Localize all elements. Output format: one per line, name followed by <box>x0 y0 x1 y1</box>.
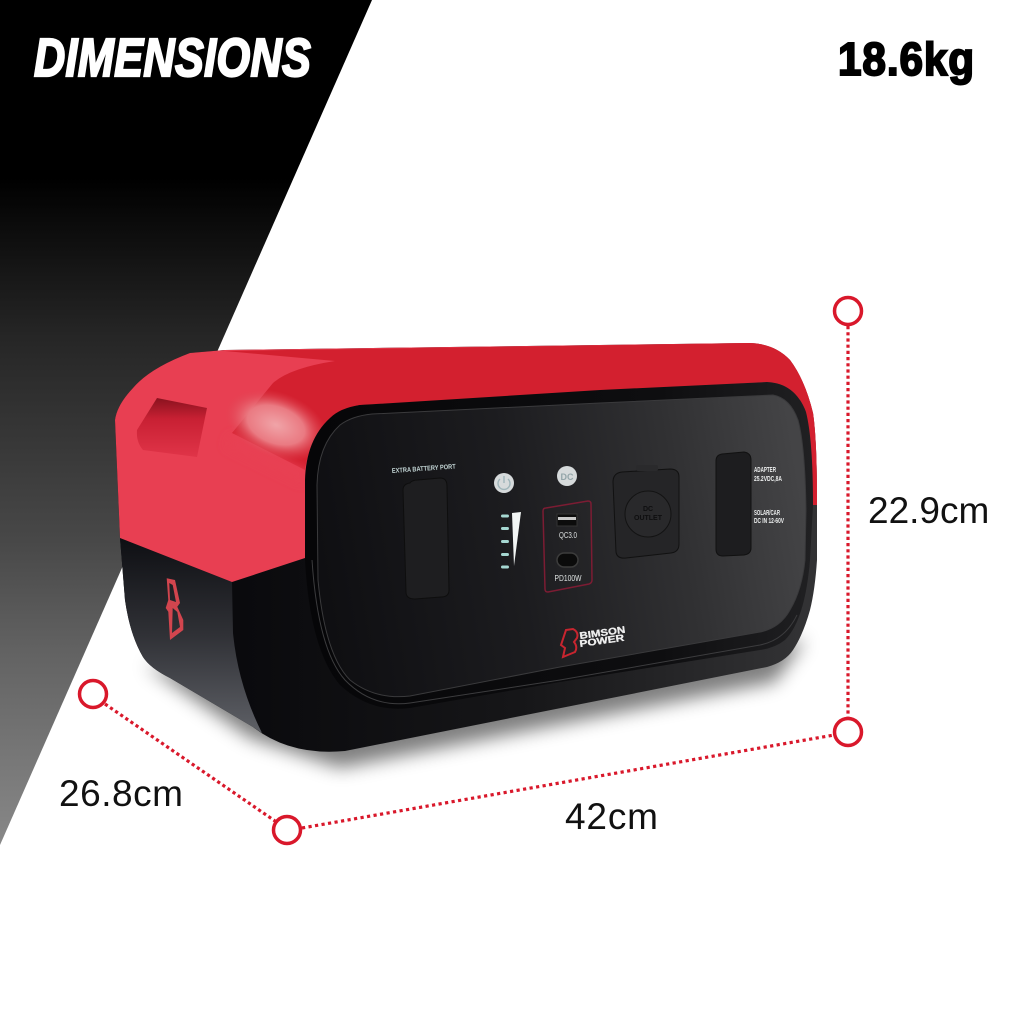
red upper shell <box>115 343 817 582</box>
solar label: SOLAR/CAR <box>754 508 780 517</box>
USB-A port <box>557 514 577 526</box>
solar label <box>754 508 784 525</box>
dimension line: width <box>274 735 834 844</box>
highlight on corner <box>214 376 338 474</box>
weight: 18.6kg <box>838 34 974 85</box>
DC button <box>557 466 577 486</box>
DC outlet cover: DC <box>643 506 653 513</box>
label: depth: 26.8cm <box>59 773 183 814</box>
USB-C port <box>557 553 578 567</box>
dimension line: depth <box>80 680 275 821</box>
label: width: 42cm <box>565 796 658 837</box>
battery level indicator <box>501 512 521 568</box>
background: diagonal black-to-grey panel <box>0 0 372 845</box>
front panel face <box>317 395 806 697</box>
DC outlet cover <box>613 465 679 558</box>
red top front face <box>225 343 817 505</box>
title: DIMENSIONS <box>34 29 311 88</box>
B logo on side <box>166 578 183 640</box>
label: height: 22.9cm <box>868 490 989 531</box>
power button <box>494 473 514 493</box>
extra battery port cover <box>403 478 449 599</box>
ground shadow <box>145 640 805 768</box>
soft lower edge of corner face <box>228 440 306 478</box>
power station product <box>115 343 817 752</box>
extra battery port label: EXTRA BATTERY PORT <box>392 463 457 475</box>
USB port group <box>543 501 592 592</box>
DC outlet cover: OUTLET <box>634 515 663 522</box>
PD100W label: PD100W <box>554 574 582 583</box>
body base silhouette <box>115 343 817 752</box>
USB-A tongue <box>558 517 576 520</box>
dimension line: height <box>834 298 862 746</box>
bezel groove <box>312 560 797 704</box>
adapter label <box>754 465 782 483</box>
lower side shell <box>120 538 262 733</box>
brand logo: POWER <box>579 633 625 650</box>
input port cover <box>716 452 751 556</box>
adapter label: ADAPTER <box>754 465 777 474</box>
solar label: DC IN 12-60V <box>754 516 784 525</box>
carry handle recess <box>137 398 207 457</box>
brand logo <box>561 625 626 657</box>
front bezel <box>305 382 813 709</box>
adapter label: 25.2VDC,8A <box>754 474 782 483</box>
QC3.0 label: QC3.0 <box>559 531 577 540</box>
brand logo: BIMSON <box>579 625 626 642</box>
DC button: DC <box>560 472 574 482</box>
